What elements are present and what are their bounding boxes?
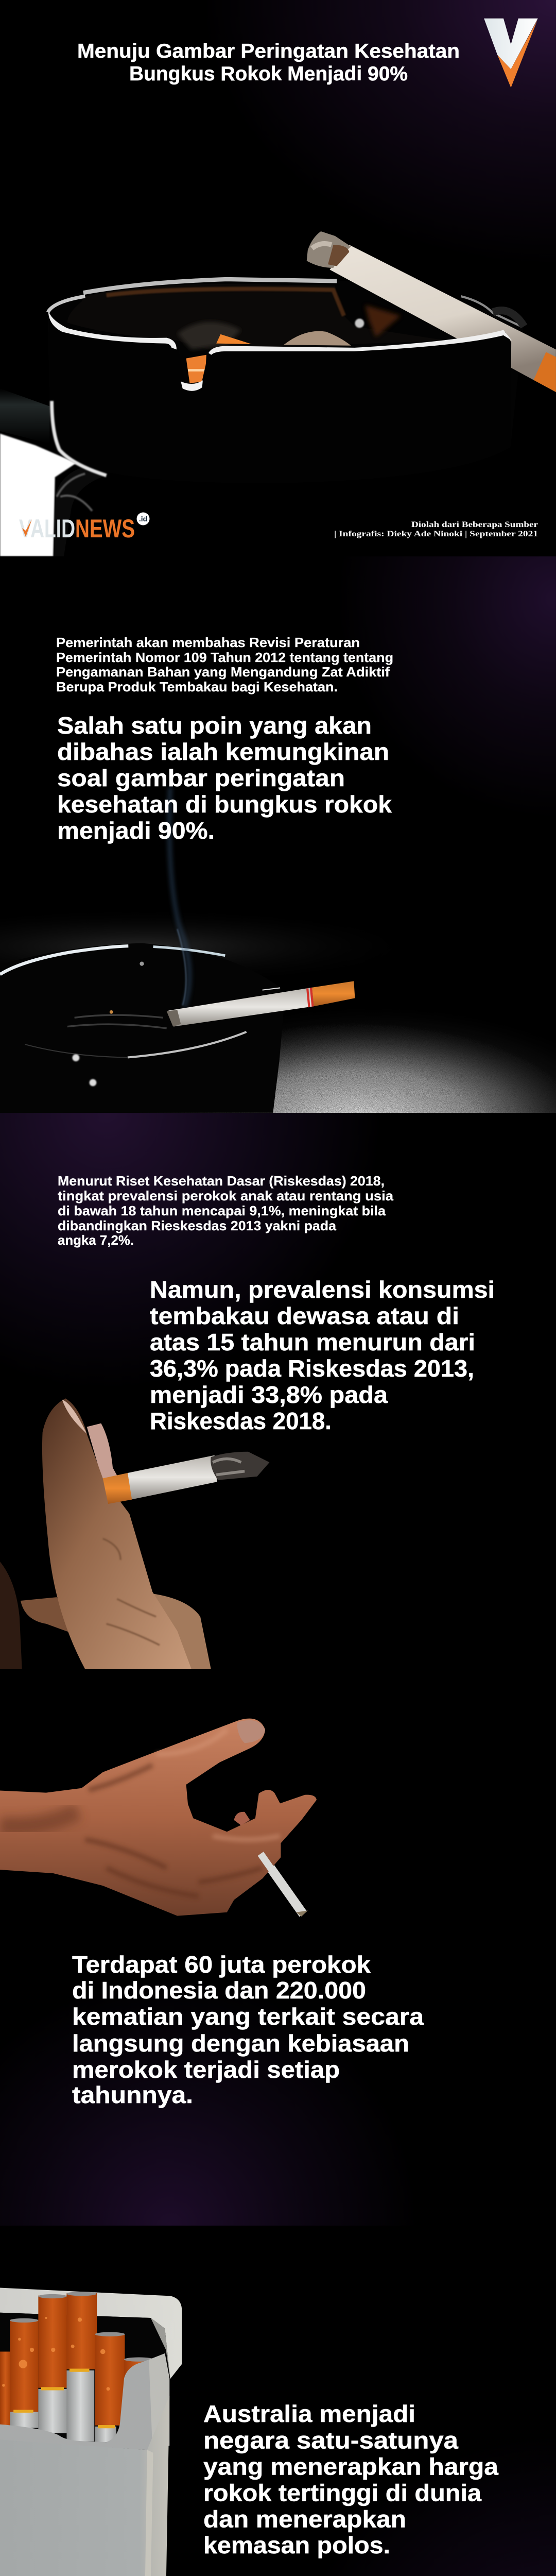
logo: Validnews.id: NEWS: [75, 514, 135, 543]
key statement: 36,3% pada Riskesdas 2013,: [150, 1355, 474, 1382]
intro text: Pemerintah akan membahas Revisi Peraturan: [56, 635, 360, 650]
panel background gradient: [0, 0, 556, 556]
cigarettes: [0, 2351, 11, 2426]
logo: Validnews.id: VALID: [19, 514, 75, 543]
key statement: langsung dengan kebiasaan: [72, 2030, 409, 2057]
intro text: Menurut Riset Kesehatan Dasar (Riskesdas) 2018,: [58, 1173, 385, 1189]
key statement: yang menerapkan harga: [203, 2453, 498, 2480]
pack sleeve: [0, 2353, 169, 2450]
source credit: | Infografis: Dieky Ade Ninoki | September 2021: [334, 530, 538, 538]
photo: ashtray with cigarette and smoke: [0, 787, 556, 1245]
panel: Australia plain packaging: [0, 2287, 556, 2576]
intro text: di bawah 18 tahun mencapai 9,1%, meningkat bila: [58, 1203, 386, 1218]
intro text: tingkat prevalensi perokok anak atau rentang usia: [58, 1188, 394, 1204]
key statement: menjadi 90%.: [57, 817, 215, 844]
intro text: dibandingkan Rieskesdas 2013 yakni pada: [58, 1218, 337, 1233]
panel: smokers in Indonesia: [0, 1719, 424, 2226]
key statement: tembakau dewasa atau di: [150, 1302, 459, 1329]
smoke: [169, 787, 189, 1007]
key statement: kesehatan di bungkus rokok: [57, 791, 392, 818]
cigarette: [168, 988, 314, 1027]
key statement: di Indonesia dan 220.000: [72, 1977, 366, 2004]
title: Bungkus Rokok Menjadi 90%: [129, 63, 408, 85]
key statement: [203, 2400, 498, 2558]
key statement: negara satu-satunya: [203, 2427, 458, 2453]
key statement: dan menerapkan: [203, 2506, 406, 2533]
key statement: [150, 1276, 495, 1434]
key statement: kematian yang terkait secara: [72, 2003, 424, 2030]
photo: plain cigarette pack: [0, 2288, 182, 2576]
intro text: angka 7,2%.: [58, 1232, 134, 1248]
panel: intro with ashtray photo: [0, 0, 556, 556]
photo: ashtray with burning cigarette: [0, 231, 556, 556]
key statement: Salah satu poin yang akan: [57, 712, 372, 739]
intro text: [58, 1173, 394, 1248]
source credit: [334, 520, 538, 538]
title: [77, 40, 460, 85]
key statement: soal gambar peringatan: [57, 765, 345, 791]
key statement: Terdapat 60 juta perokok: [72, 1951, 371, 1978]
key statement: atas 15 tahun menurun dari: [150, 1329, 475, 1355]
key statement: Australia menjadi: [203, 2400, 415, 2427]
panel background gradient: [0, 2226, 556, 2576]
key statement: menjadi 33,8% pada: [150, 1381, 388, 1408]
intro text: Berupa Produk Tembakau bagi Kesehatan.: [56, 679, 338, 694]
icon: V logo: [484, 19, 538, 88]
panel background gradient: [0, 1669, 556, 2226]
ashtray front with rim highlights: [49, 314, 511, 483]
cigarette: [128, 1455, 217, 1500]
pack front: [0, 2396, 169, 2576]
cigarette butts inside ashtray: [216, 334, 252, 344]
logo: Validnews.id: [19, 512, 149, 543]
panel: revision of regulation: [0, 556, 556, 1113]
key statement: [72, 1951, 424, 2108]
key statement: kemasan polos.: [203, 2532, 390, 2558]
key statement: Namun, prevalensi konsumsi: [150, 1276, 495, 1303]
source credit: Diolah dari Beberapa Sumber: [411, 520, 538, 529]
key statement: rokok tertinggi di dunia: [203, 2479, 481, 2506]
title: Menuju Gambar Peringatan Kesehatan: [77, 40, 460, 62]
key statement: dibahas ialah kemungkinan: [57, 738, 389, 765]
key statement: Riskesdas 2018.: [150, 1408, 332, 1434]
panel background gradient: [0, 556, 556, 1113]
logo: Validnews.id: .id: [139, 515, 147, 523]
key statement: merokok terjadi setiap: [72, 2056, 340, 2083]
intro text: Pengamanan Bahan yang Mengandung Zat Adiktif: [56, 664, 390, 680]
intro text: Pemerintah Nomor 109 Tahun 2012 tentang tentang: [56, 650, 393, 665]
key statement: [57, 712, 392, 844]
intro text: [56, 635, 393, 694]
cigarette resting on rim: [329, 245, 556, 392]
panel background gradient: [0, 1113, 556, 1669]
photo: hand holding cigarette: [0, 1719, 317, 1917]
panel: Riskesdas prevalence: [0, 1113, 495, 1669]
key statement: tahunnya.: [72, 2081, 193, 2108]
photo: fingers holding cigarette: [0, 1398, 269, 1669]
